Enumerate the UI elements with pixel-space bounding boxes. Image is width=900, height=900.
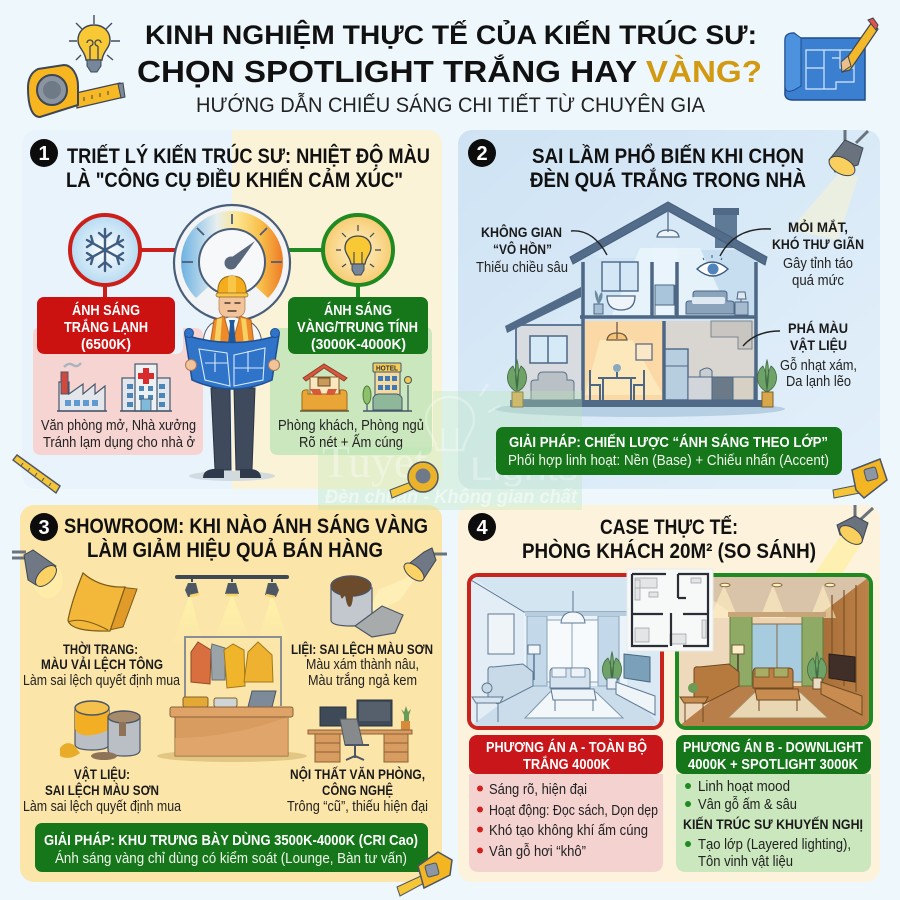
panel 1 heading: TRIẾT LÝ KIẾN TRÚC SƯ: NHIỆT ĐỘ MÀU xyxy=(67,144,430,168)
text: fashion: MÀU VẢI LỆCH TÔNG xyxy=(41,655,163,672)
callout: eye strain: KHÓ THƯ GIÃN xyxy=(772,235,864,252)
panel 3: showroom xyxy=(12,505,452,896)
illustration: house cross-section xyxy=(495,202,785,417)
panel 1 heading xyxy=(66,144,430,192)
eye icon xyxy=(697,255,728,276)
option A list: Vân gỗ hơi “khô” xyxy=(489,843,586,860)
warm light text xyxy=(278,418,424,451)
warm light text: Phòng khách, Phòng ngủ xyxy=(278,418,424,434)
text: office furniture: NỘI THẤT VĂN PHÒNG, xyxy=(290,765,425,782)
callout: material colour: PHÁ MÀU xyxy=(788,320,848,336)
bath xyxy=(607,296,635,310)
text: materials: VẬT LIỆU: xyxy=(74,765,130,782)
callout leader lines xyxy=(571,229,780,346)
option B heading: 4000K + SPOTLIGHT 3000K xyxy=(688,756,858,773)
panel 3 heading xyxy=(64,515,428,562)
text: office furniture: CÔNG NGHỆ xyxy=(322,781,393,798)
solution box panel 2: GIẢI PHÁP: CHIẾN LƯỢC “ÁNH SÁNG THEO LỚP” xyxy=(509,433,828,451)
watermark: Đèn chuẩn - Không gian chất xyxy=(325,487,578,508)
icon: hotel: HOTEL xyxy=(376,364,398,372)
panel 4 heading: CASE THỰC TẾ: xyxy=(600,516,738,539)
icon: tape measure top left xyxy=(28,65,125,117)
icon: fabric xyxy=(68,573,137,631)
icon: snowflake circle xyxy=(70,215,140,285)
bed xyxy=(686,291,734,314)
structural frame xyxy=(580,262,757,400)
icon: tape measure panel 1 xyxy=(390,462,438,498)
title line 1: KINH NGHIỆM THỰC TẾ CỦA KIẾN TRÚC SƯ: xyxy=(145,18,757,50)
pink panel: cold light usage xyxy=(33,328,203,455)
icon: office desk xyxy=(308,700,412,762)
icon: ruler xyxy=(13,455,60,493)
green label: warm light: ÁNH SÁNG xyxy=(324,302,392,319)
number badge 2: 2 xyxy=(476,143,488,165)
panel 4: living room case xyxy=(458,505,880,882)
text: fashion: THỜI TRANG: xyxy=(63,640,138,657)
kitchen units xyxy=(665,349,688,400)
number badge 3: 3 xyxy=(38,517,50,539)
icon: left wall spotlight xyxy=(12,550,63,598)
architect figure xyxy=(184,276,280,481)
panel 2: common mistakes xyxy=(458,130,887,498)
blueprint held by architect xyxy=(184,328,280,389)
cold light text xyxy=(41,418,196,451)
icon: light bulb top left xyxy=(69,15,120,72)
icon: hospital xyxy=(120,364,172,411)
icon: house and sofa xyxy=(300,364,349,411)
dining set xyxy=(607,322,627,340)
illustration: floor plan xyxy=(627,569,713,651)
number badge 1: 1 xyxy=(38,143,50,165)
panel 1: philosophy xyxy=(13,130,442,493)
solution box panel 3 xyxy=(35,823,428,872)
icon: paint bucket and sponge xyxy=(331,576,403,637)
panel 2 heading: ĐÈN QUÁ TRẮNG TRONG NHÀ xyxy=(530,168,806,192)
living sofa in annex xyxy=(531,372,574,400)
callout: soulless space xyxy=(476,223,568,276)
text: paint: Màu trắng ngả kem xyxy=(308,672,417,689)
callout: material colour: VẬT LIỆU xyxy=(790,336,847,353)
callout: soulless space: KHÔNG GIAN xyxy=(481,223,562,240)
panel 2 heading xyxy=(530,144,806,192)
callout: eye strain: Gây tỉnh táo xyxy=(783,256,853,272)
callout: soulless space: Thiếu chiều sâu xyxy=(476,260,568,276)
icon: spotlight panel 4 xyxy=(815,505,873,580)
solution box panel 2 xyxy=(496,427,842,475)
red label: cold white light xyxy=(37,297,175,354)
red label text: TRẮNG LẠNH xyxy=(64,318,148,336)
callout: material colour: Da lạnh lẽo xyxy=(786,374,851,390)
illustration: showroom track light rack and desk xyxy=(157,575,307,762)
option A list: Hoạt động: Đọc sách, Dọn dẹp xyxy=(489,803,658,819)
icon: tape measure panel 3 xyxy=(397,852,452,896)
option A heading: TRẮNG 4000K xyxy=(523,755,610,773)
panel 4 heading xyxy=(522,516,816,563)
chart: colour temperature gauge xyxy=(174,205,290,321)
icon: tape measure panel 2 xyxy=(833,459,887,498)
text: fashion xyxy=(23,640,181,689)
number badge 1 xyxy=(30,139,58,167)
option B list: KIẾN TRÚC SƯ KHUYẾN NGHỊ xyxy=(683,815,863,832)
option A list: Khó tạo không khí ấm cúng xyxy=(489,823,648,839)
solution box panel 3: GIẢI PHÁP: KHU TRƯNG BÀY DÙNG 3500K-4000K (CRI Cao) xyxy=(44,831,418,849)
panel 1 background xyxy=(22,130,442,489)
panel 4 background xyxy=(458,505,880,882)
option B list: Linh hoạt mood xyxy=(698,779,790,795)
icon: paint cans xyxy=(60,701,140,760)
number badge 3 xyxy=(30,513,58,541)
option A list xyxy=(469,774,663,872)
panel 2 heading: SAI LẦM PHỔ BIẾN KHI CHỌN xyxy=(532,144,804,168)
subtitle: HƯỚNG DẪN CHIẾU SÁNG CHI TIẾT TỪ CHUYÊN GIA xyxy=(196,94,705,117)
title line 2: CHỌN SPOTLIGHT TRẮNG HAY VÀNG? xyxy=(137,53,762,89)
text: office furniture: Trông “cũ”, thiếu hiện đại xyxy=(287,799,428,815)
illustration: option A room xyxy=(469,575,662,728)
icon: spotlight panel 2 xyxy=(790,130,868,240)
number badge 2 xyxy=(468,139,496,167)
connectors xyxy=(105,250,358,298)
text: materials: Làm sai lệch quyết định mua xyxy=(23,799,182,815)
option B heading xyxy=(676,735,871,774)
icon: right wall spotlight xyxy=(366,548,447,618)
callout: material colour: Gỗ nhạt xám, xyxy=(780,357,857,374)
text: paint: LIỆI: SAI LỆCH MÀU SƠN xyxy=(291,640,433,657)
option B list: Tôn vinh vật liệu xyxy=(698,854,793,870)
icon: blueprint and pencil top right xyxy=(785,18,878,100)
icon: hotel xyxy=(363,363,412,411)
title block xyxy=(137,18,762,117)
red label text xyxy=(64,302,148,353)
text: fashion: Làm sai lệch quyết định mua xyxy=(23,673,181,689)
panel 2 background xyxy=(458,130,880,489)
callout: eye strain: quá mức xyxy=(792,273,844,289)
callout: material colour xyxy=(780,320,857,390)
panel 3 heading: SHOWROOM: KHI NÀO ÁNH SÁNG VÀNG xyxy=(64,515,428,538)
warm light text: Rõ nét + Ấm cúng xyxy=(299,434,403,451)
ground and plants xyxy=(510,400,772,407)
illustration: option B room xyxy=(677,575,871,728)
number badge 4: 4 xyxy=(476,517,488,539)
red label text: (6500K) xyxy=(81,336,131,353)
number badge 4 xyxy=(468,513,496,541)
green panel: warm light usage xyxy=(270,328,432,455)
icon: warm bulb circle xyxy=(323,215,393,285)
option A heading: PHƯƠNG ÁN A - TOÀN BỘ xyxy=(486,738,647,756)
icon: factory xyxy=(57,363,107,411)
panel 3 background xyxy=(20,505,442,882)
option A heading xyxy=(469,735,663,774)
cold light text: Văn phòng mở, Nhà xưởng xyxy=(41,418,196,434)
option B list xyxy=(676,774,871,872)
panel 1 heading: LÀ "CÔNG CỤ ĐIỀU KHIỂN CẢM XÚC" xyxy=(66,168,403,192)
option B list: Vân gỗ ấm & sâu xyxy=(698,796,797,813)
text: office furniture xyxy=(287,765,428,815)
solution box panel 2: Phối hợp linh hoạt: Nền (Base) + Chiếu nhấn (Accent) xyxy=(508,452,829,469)
green label: warm light xyxy=(288,297,428,354)
option B list: Tạo lớp (Layered lighting), xyxy=(698,837,851,853)
callout: soulless space: “VÔ HỒN” xyxy=(493,240,552,257)
callout: eye strain: MỎI MẮT, xyxy=(788,218,848,235)
watermark xyxy=(318,384,582,510)
watermark: Lights xyxy=(470,451,578,487)
green label: warm light: (3000K-4000K) xyxy=(311,336,406,353)
option A list: Sáng rõ, hiện đại xyxy=(489,782,587,798)
text: materials: SAI LỆCH MÀU SƠN xyxy=(45,781,159,798)
text: paint xyxy=(291,640,433,689)
solution box panel 3: Ánh sáng vàng chỉ dùng có kiểm soát (Lounge, Bàn tư vấn) xyxy=(55,850,407,867)
green label: warm light: VÀNG/TRUNG TÍNH xyxy=(297,319,418,336)
option B heading: PHƯƠNG ÁN B - DOWNLIGHT xyxy=(683,739,863,756)
panel 4 heading: PHÒNG KHÁCH 20M² (SO SÁNH) xyxy=(522,539,816,563)
red label text: ÁNH SÁNG xyxy=(72,302,140,319)
panel 3 heading: LÀM GIẢM HIỆU QUẢ BÁN HÀNG xyxy=(87,538,383,562)
watermark: Tuyet xyxy=(322,436,427,487)
cold light text: Tránh lạm dụng cho nhà ở xyxy=(43,435,195,451)
callout: eye strain xyxy=(772,218,864,289)
text: paint: Màu xám thành nâu, xyxy=(306,657,419,673)
text: materials xyxy=(23,765,182,815)
